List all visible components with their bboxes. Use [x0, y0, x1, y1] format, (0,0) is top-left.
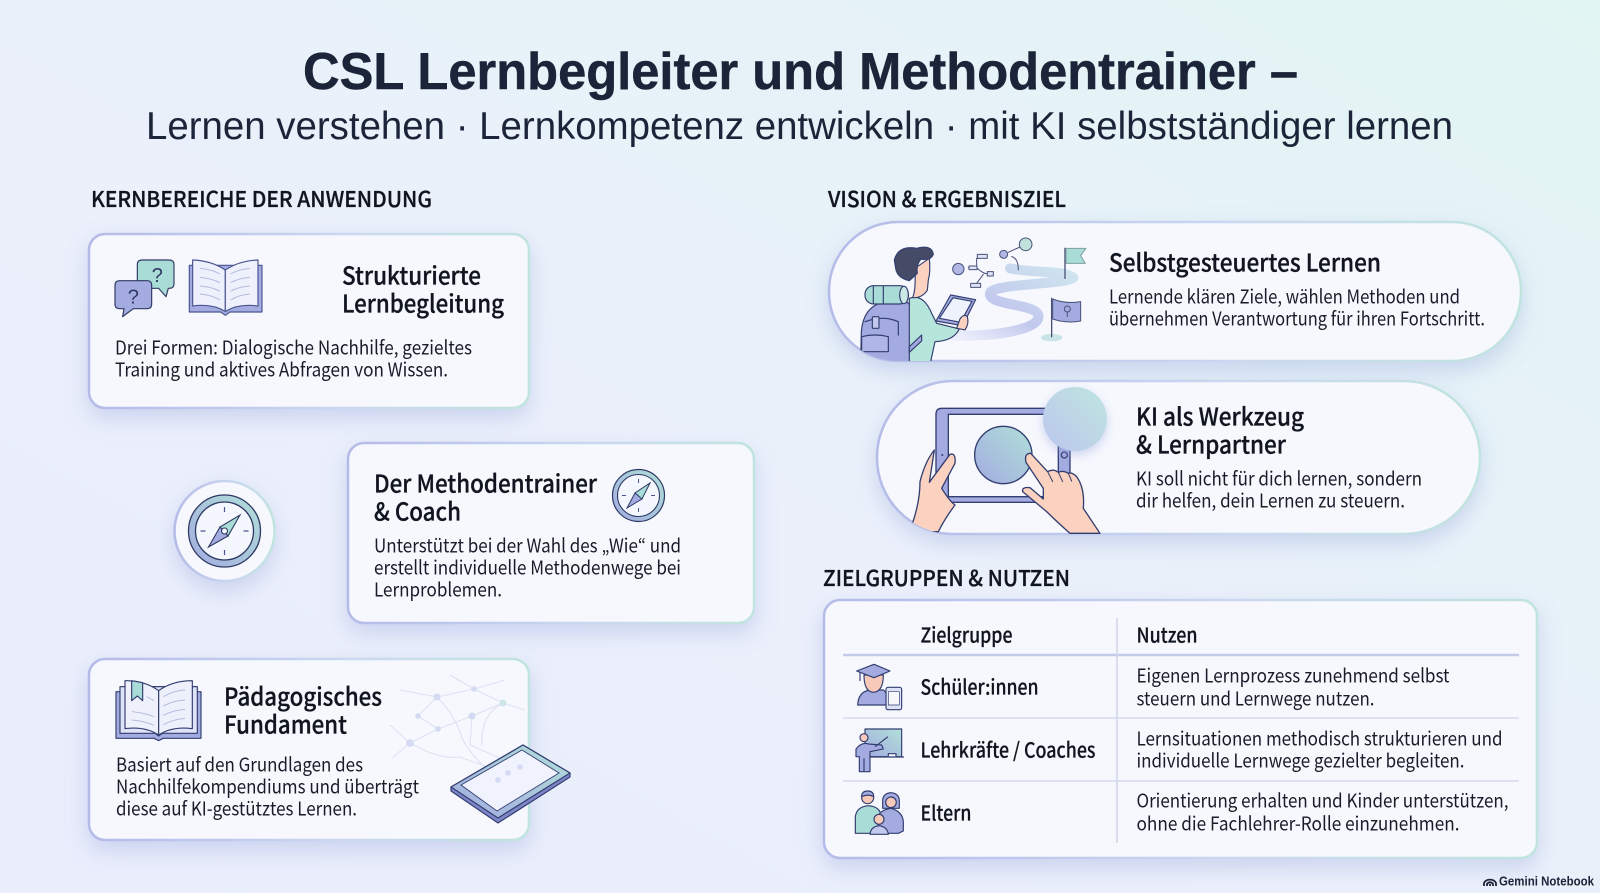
icon: question bubbles: ?: [128, 286, 139, 308]
row text: Lehrkräfte / Coaches: Lernsituationen methodisch strukturieren und: [1136, 724, 1502, 751]
panel: Selbstgesteuertes Lernen: [829, 222, 1521, 362]
body text: dir helfen, dein Lernen zu steuern.: [1136, 486, 1405, 513]
row text: Schüler:innen: Eigenen Lernprozess zunehmend selbst: [1136, 661, 1450, 688]
heading: Der Methodentrainer & Coach: & Coach: [374, 493, 461, 528]
row label: Eltern: Eltern: [920, 796, 972, 826]
body text: Lernproblemen.: [374, 575, 502, 602]
translucent circle: [1043, 387, 1107, 451]
icon: family: [855, 791, 903, 834]
learner figure: [861, 247, 976, 362]
heading: KI als Werkzeug & Lernpartner: KI als Werkzeug: [1136, 398, 1304, 433]
body text: diese auf KI-gestütztes Lernen.: [116, 794, 357, 821]
illustration: network flowing into tablet: [390, 675, 570, 823]
icon: open book: [189, 260, 262, 315]
heading: Der Methodentrainer & Coach: Der Methodentrainer: [374, 465, 598, 500]
body text: erstellt individuelle Methodenwege bei: [374, 553, 681, 580]
body text: Unterstützt bei der Wahl des „Wie“ und: [374, 531, 681, 558]
panel: KI als Werkzeug & Lernpartner: [877, 381, 1480, 534]
body text: Training und aktives Abfragen von Wissen.: [115, 355, 448, 382]
body text: übernehmen Verantwortung für ihren Fortschritt.: [1109, 304, 1485, 331]
body text: Drei Formen: Dialogische Nachhilfe, gezieltes: [115, 333, 472, 360]
icon badge: large compass: [174, 481, 274, 581]
column header: Nutzen: Nutzen: [1136, 618, 1198, 648]
panel: Pädagogisches Fundament: [89, 659, 570, 840]
heading: Strukturierte Lernbegleitung: Strukturierte: [342, 257, 481, 292]
panel: Strukturierte Lernbegleitung: [89, 234, 529, 408]
icon: question bubbles: ?: [152, 265, 163, 287]
icon: question bubbles: [115, 260, 174, 317]
illustration: hands on tablet: [909, 408, 1100, 533]
panel: Der Methodentrainer & Coach: [348, 443, 754, 623]
heading: Selbstgesteuertes Lernen: Selbstgesteuertes Lernen: [1109, 244, 1381, 279]
body text: KI soll nicht für dich lernen, sondern: [1136, 464, 1422, 491]
heading: Strukturierte Lernbegleitung: Lernbegleitung: [342, 285, 504, 320]
panel: audience table: [824, 600, 1537, 858]
row text: Schüler:innen: steuern und Lernwege nutzen.: [1136, 684, 1374, 711]
heading: KI als Werkzeug & Lernpartner: & Lernpartner: [1136, 426, 1287, 461]
row text: Eltern: ohne die Fachlehrer-Rolle einzunehmen.: [1136, 809, 1460, 836]
body text: Nachhilfekompendiums und überträgt: [116, 772, 419, 799]
body text: Lernende klären Ziele, wählen Methoden und: [1109, 282, 1460, 309]
row text: Lehrkräfte / Coaches: individuelle Lernwege gezielter begleiten.: [1136, 746, 1464, 773]
heading: Pädagogisches Fundament: Pädagogisches: [224, 678, 382, 713]
icon: book with bookmark: [116, 681, 201, 741]
body text: Basiert auf den Grundlagen des: [116, 750, 363, 777]
subtitle: Lernen verstehen · Lernkompetenz entwickeln · mit KI selbstständiger lernen: [146, 105, 1453, 148]
heading: Pädagogisches Fundament: Fundament: [224, 706, 347, 741]
heading: Kernbereiche der Anwendung: KERNBEREICHE DER ANWENDUNG: [91, 182, 432, 214]
icon: small compass: [612, 470, 664, 522]
illustration: learner with backpack and path: [861, 238, 1086, 362]
row label: Schüler:innen: Schüler:innen: [920, 670, 1038, 700]
heading: Zielgruppen & Nutzen: ZIELGRUPPEN & NUTZEN: [823, 561, 1070, 593]
icon: student: [857, 664, 902, 710]
row text: Eltern: Orientierung erhalten und Kinder unterstützen,: [1136, 786, 1508, 813]
heading: Vision & Ergebnisziel: VISION & ERGEBNISZIEL: [827, 182, 1066, 214]
row label: Lehrkräfte / Coaches: Lehrkräfte / Coaches: [920, 733, 1096, 763]
title: CSL Lernbegleiter und Methodentrainer –: [303, 43, 1298, 101]
icon: teacher: [856, 729, 904, 772]
column header: Zielgruppe: Zielgruppe: [920, 618, 1012, 648]
